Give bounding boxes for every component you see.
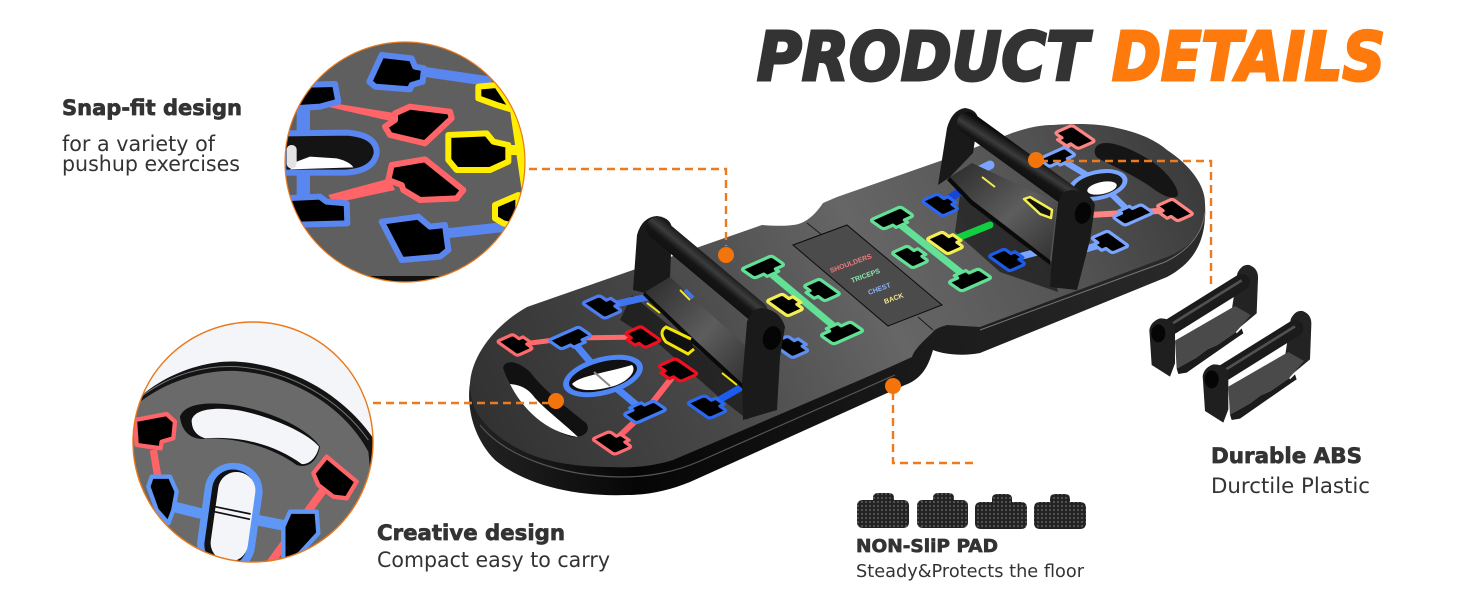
callout: snap-fit design bbox=[62, 96, 242, 176]
callout: non-slip pad bbox=[856, 536, 1085, 582]
right centre hole bbox=[1066, 164, 1130, 206]
callout: non-slip pad: Steady&Protects the floor bbox=[856, 561, 1085, 582]
muscle legend panel: CHEST bbox=[867, 282, 893, 297]
left centre hole bbox=[558, 347, 648, 405]
title: PRODUCT bbox=[757, 18, 1093, 96]
right handle bbox=[938, 108, 1095, 290]
handle two bbox=[1203, 311, 1311, 423]
seam lines bbox=[807, 223, 933, 330]
muscle legend panel: BACK bbox=[883, 292, 905, 306]
product: foldable push-up board bbox=[469, 108, 1205, 495]
title: DETAILS bbox=[1112, 18, 1385, 96]
callout: durable abs: Durable ABS bbox=[1211, 444, 1362, 468]
callout: durable abs bbox=[1211, 444, 1370, 498]
muscle legend panel: TRICEPS bbox=[850, 268, 882, 285]
callout: snap-fit design: Snap-fit design bbox=[62, 96, 242, 120]
connector lines bbox=[515, 137, 1175, 443]
callout: creative design: Compact easy to carry bbox=[377, 548, 610, 572]
callout leader: non-slip pad bbox=[885, 378, 977, 463]
callout: creative design: Creative design bbox=[377, 521, 565, 545]
callout: snap-fit design: pushup exercises bbox=[62, 152, 240, 176]
detail circle border bbox=[133, 322, 373, 562]
callout: durable abs: Durctile Plastic bbox=[1211, 474, 1370, 498]
push-up position pads bbox=[497, 125, 1193, 455]
muscle legend panel: SHOULDERS bbox=[829, 253, 873, 275]
left curved slot bbox=[503, 362, 588, 437]
callout leader: creative design bbox=[373, 393, 564, 409]
detail circle: snap-fit pads bbox=[283, 42, 527, 283]
handle one bbox=[1149, 265, 1258, 377]
icon: two detachable handles bbox=[1149, 265, 1311, 423]
detail circle border bbox=[285, 42, 525, 282]
handle cast shadows bbox=[620, 195, 1058, 420]
callout leader: durable abs bbox=[1028, 152, 1211, 287]
callout leader: snap-fit bbox=[529, 169, 734, 263]
board top surface bbox=[470, 124, 1205, 467]
left handle bbox=[633, 216, 785, 420]
muscle legend panel bbox=[793, 225, 942, 326]
callout: creative design bbox=[377, 521, 610, 572]
board side body bbox=[469, 203, 1205, 495]
title bbox=[757, 18, 1385, 96]
callout: non-slip pad: NON-SliP PAD bbox=[856, 536, 998, 557]
right curved slot bbox=[1095, 143, 1178, 197]
callout: snap-fit design: for a variety of bbox=[62, 132, 216, 156]
detail circle: compact curved edge bbox=[134, 323, 372, 562]
icon: four non-slip pads bbox=[857, 493, 1086, 529]
